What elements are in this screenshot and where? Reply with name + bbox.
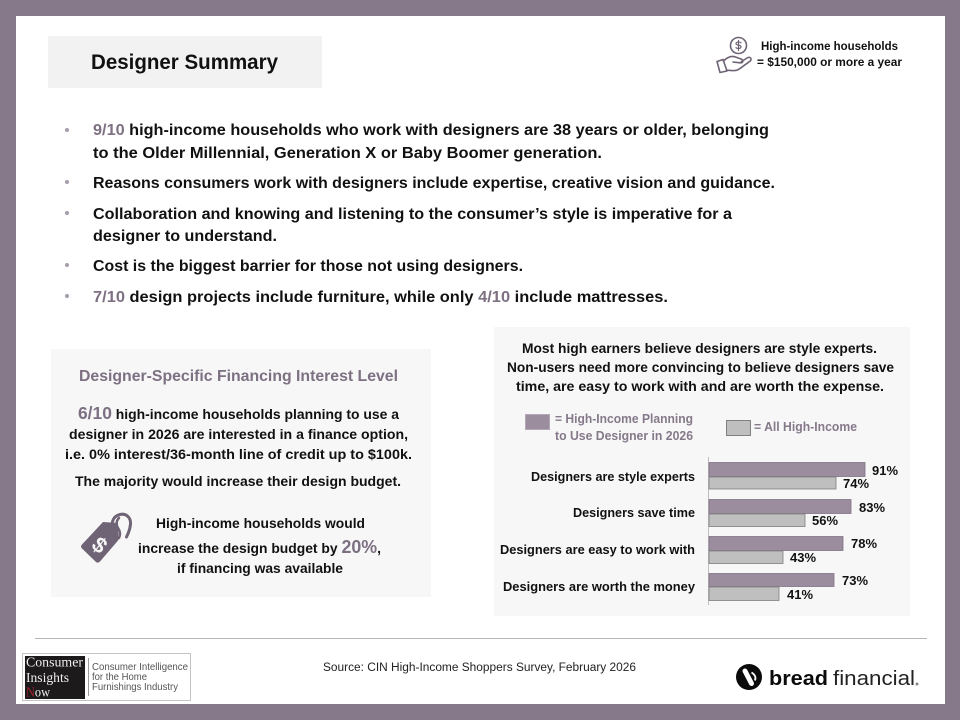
bullet 3: designer to understand.	[93, 228, 277, 245]
budget increase text	[138, 515, 381, 576]
bullet 3	[65, 206, 732, 245]
row: worth the money: 73%	[842, 574, 868, 588]
bullet 1: 9/10 high-income households who work with designers are 38 years or older, belonging	[93, 122, 769, 139]
row: worth the money	[503, 574, 868, 602]
bullet 3: Collaboration and knowing and listening to the consumer’s style is imperative for a	[93, 206, 732, 223]
logo: Consumer Insights Now: Now	[26, 686, 51, 700]
row: easy to work with: Designers are easy to work with	[500, 543, 695, 557]
bullet list	[65, 122, 775, 306]
financing text block	[65, 403, 412, 489]
panel: financing interest	[51, 349, 431, 597]
chart heading: Most high earners believe designers are style experts.	[522, 341, 877, 356]
budget increase text: increase the design budget by 20%,	[138, 537, 381, 557]
logo: Consumer Insights Now	[22, 654, 190, 700]
legend: to Use Designer in 2026	[555, 429, 693, 443]
financing text block: The majority would increase their design budget.	[75, 473, 401, 489]
chart heading: Non-users need more convincing to believe designers save	[507, 360, 894, 375]
row: easy to work with: 78%	[851, 537, 877, 551]
bullet 2: Reasons consumers work with designers include expertise, creative vision and guidance.	[93, 175, 775, 192]
bullet 4: Cost is the biggest barrier for those not using designers.	[93, 258, 523, 275]
legend	[526, 412, 857, 443]
row: style experts: 74%	[843, 477, 869, 491]
icon: price tag: $	[87, 532, 112, 559]
bullet 5: 7/10 design projects include furniture, while only 4/10 include mattresses.	[93, 289, 668, 306]
legend: = High-Income Planning	[555, 412, 693, 426]
logo: bread financial: bread	[769, 668, 828, 690]
row: save time	[573, 500, 885, 528]
financing text block: i.e. 0% interest/36-month line of credit up to $100k.	[65, 446, 412, 462]
budget increase text: High-income households would	[156, 515, 365, 531]
panel heading: Designer-Specific Financing Interest Level	[79, 368, 398, 385]
financing text block: designer in 2026 are interested in a finance option,	[69, 426, 408, 442]
logo: bread financial: financial	[833, 668, 915, 690]
chart heading	[507, 341, 894, 394]
row: save time: 56%	[812, 514, 838, 528]
legend: = All High-Income	[754, 420, 857, 434]
logo: bread financial	[736, 664, 918, 690]
row: easy to work with	[500, 536, 877, 565]
source note: Source: CIN High-Income Shoppers Survey, February 2026	[323, 662, 636, 674]
icon: price tag	[81, 514, 131, 563]
row: style experts: Designers are style experts	[531, 470, 695, 484]
panel: designer perceptions chart	[494, 327, 910, 616]
callout: high-income definition	[717, 38, 903, 72]
title	[48, 36, 322, 88]
bar chart	[500, 457, 898, 605]
title: Designer Summary	[91, 51, 278, 74]
callout: high-income definition: High-income households	[761, 41, 898, 53]
chart heading: time, are easy to work with and are worth the expense.	[516, 379, 884, 394]
row: worth the money: Designers are worth the money	[503, 580, 695, 594]
row: worth the money: 41%	[787, 588, 813, 602]
bullet 1: to the Older Millennial, Generation X or Baby Boomer generation.	[93, 145, 602, 162]
financing text block: 6/10 high-income households planning to use a	[78, 403, 399, 423]
row: style experts: 91%	[872, 464, 898, 478]
row: style experts	[531, 462, 898, 491]
logo: Consumer Insights Now: for the Home	[92, 671, 147, 683]
logo: Consumer Insights Now: Consumer	[26, 656, 83, 670]
budget increase text: if financing was available	[177, 560, 343, 576]
row: save time: 83%	[859, 501, 885, 515]
callout: high-income definition: = $150,000 or more a year	[757, 57, 903, 69]
row: save time: Designers save time	[573, 506, 695, 520]
bullet 1	[65, 122, 769, 162]
logo: Consumer Insights Now: Consumer Intelligence	[92, 661, 188, 673]
row: easy to work with: 43%	[790, 551, 816, 565]
logo: Consumer Insights Now: Insights	[26, 671, 69, 686]
logo: Consumer Insights Now: Furnishings Industry	[92, 681, 179, 693]
icon: hand holding coin	[717, 38, 751, 72]
